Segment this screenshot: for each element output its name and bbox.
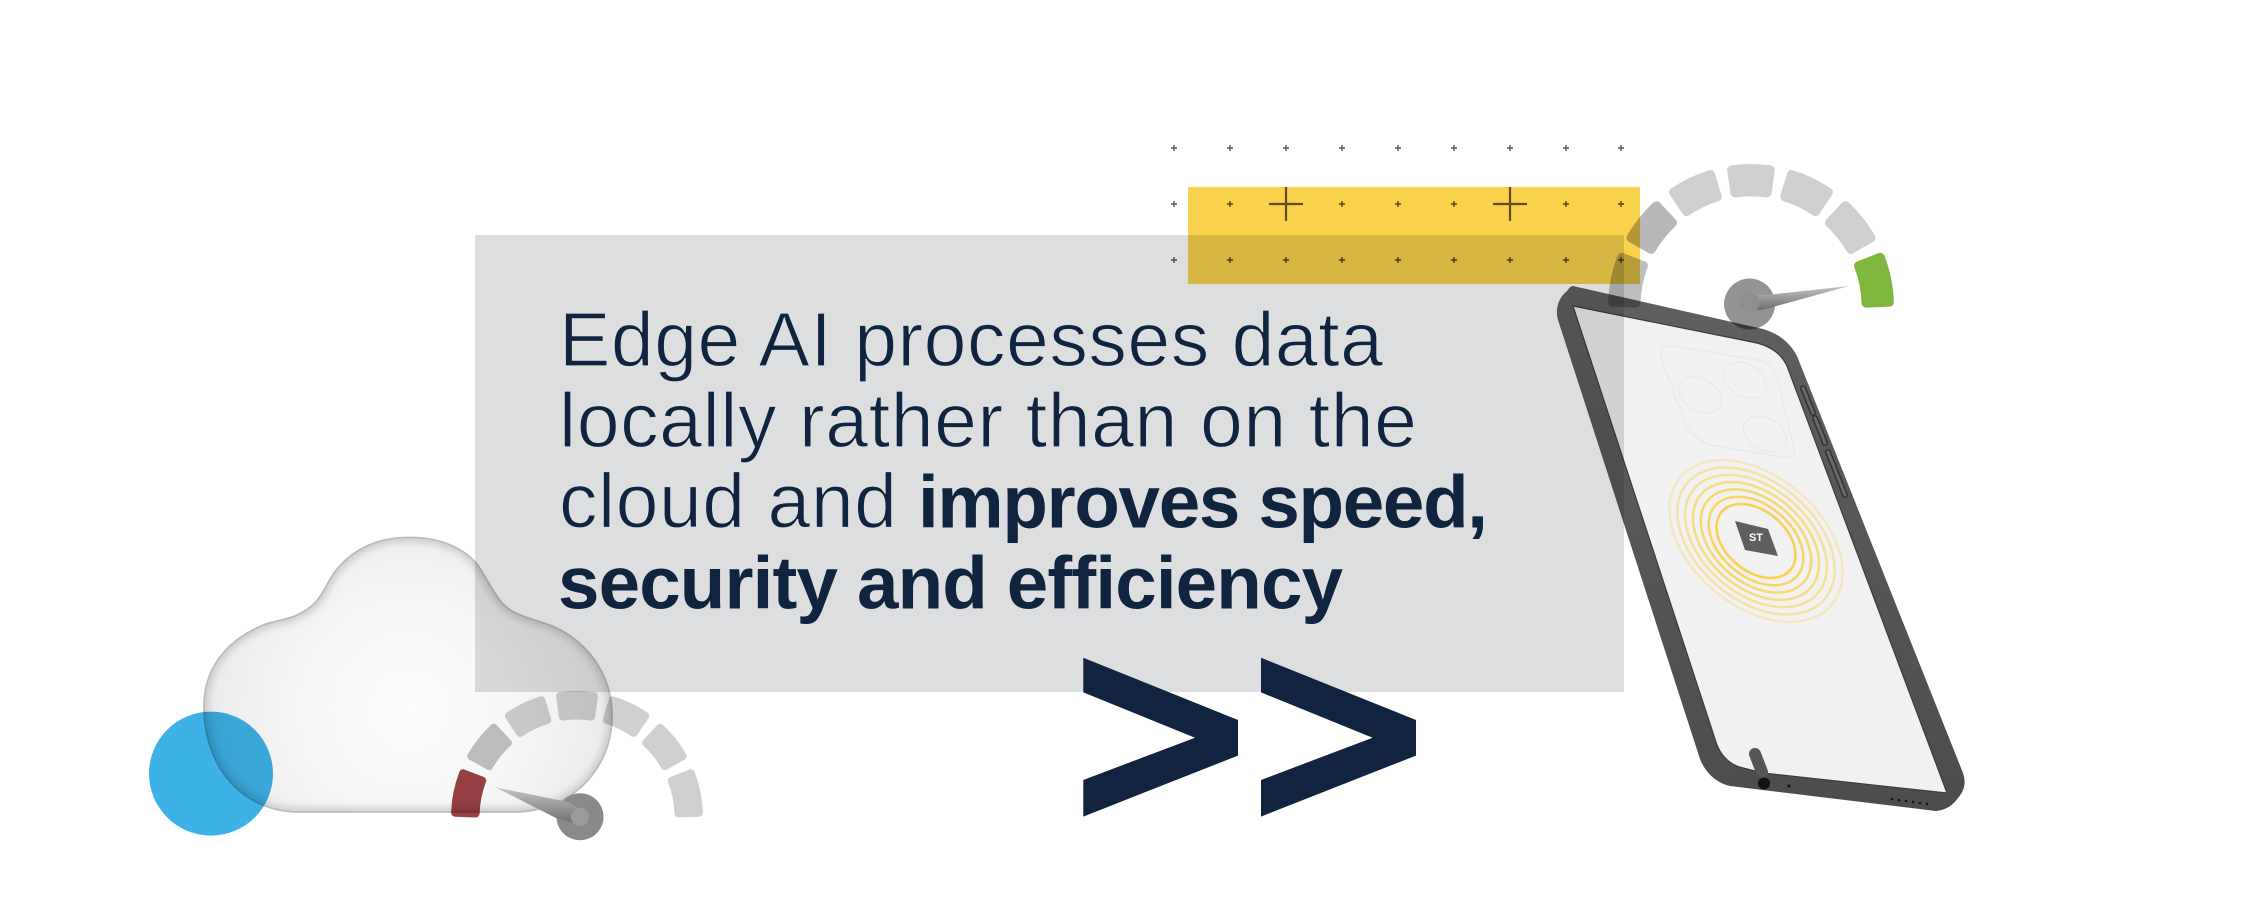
cloud outline xyxy=(204,537,612,812)
side buttons xyxy=(1803,388,1845,495)
icon: gauge low (red) xyxy=(455,695,699,814)
hub cap xyxy=(1740,292,1760,312)
headphone jack xyxy=(1758,778,1770,790)
needle xyxy=(496,788,579,824)
yellow signal rings xyxy=(1638,428,1874,654)
phone screen xyxy=(1573,306,1947,793)
headline text xyxy=(558,297,1488,624)
hub xyxy=(556,793,604,840)
camera module outline xyxy=(1661,346,1795,459)
icon: blue circle xyxy=(149,712,273,836)
phone frame xyxy=(1557,286,1965,811)
gauge needle low xyxy=(496,788,604,840)
red segment xyxy=(455,773,482,814)
decorative plus grid xyxy=(1171,145,1624,263)
icon: phone xyxy=(1557,286,1965,811)
chip xyxy=(1735,521,1778,556)
cloud body xyxy=(204,537,612,812)
green segment xyxy=(1859,257,1889,303)
headline line 2: locally rather than on the xyxy=(559,378,1417,464)
double chevron arrow xyxy=(1083,658,1416,817)
microphone hole xyxy=(1788,784,1790,788)
icon: gauge high (green) xyxy=(1613,169,1889,303)
headline line 3 bold part: improves speed, xyxy=(918,460,1488,544)
panel: yellow accent band xyxy=(1188,187,1640,284)
headline line 4 bold: security and efficiency xyxy=(558,542,1344,624)
gray segments xyxy=(471,695,699,814)
infographic canvas xyxy=(149,145,1965,840)
chip logo: ST xyxy=(1749,532,1763,544)
hub cap xyxy=(571,808,589,826)
panel: gray text background xyxy=(475,235,1624,692)
gray segments xyxy=(1613,169,1871,303)
headline line 3 regular part: cloud and xyxy=(559,458,897,544)
chevron 1 xyxy=(1083,658,1238,817)
needle xyxy=(1744,286,1849,310)
speaker holes xyxy=(1891,798,1928,805)
button slot outlines xyxy=(1803,388,1845,495)
charging pin xyxy=(1755,754,1762,772)
cloud inner bevel xyxy=(204,537,612,812)
hub xyxy=(1724,278,1775,330)
chevron 2 xyxy=(1261,658,1416,817)
icon: glass cloud xyxy=(204,537,612,812)
gauge needle high xyxy=(1724,278,1849,330)
headline line 1: Edge AI processes data xyxy=(559,297,1383,383)
button slot fills xyxy=(1803,388,1845,495)
